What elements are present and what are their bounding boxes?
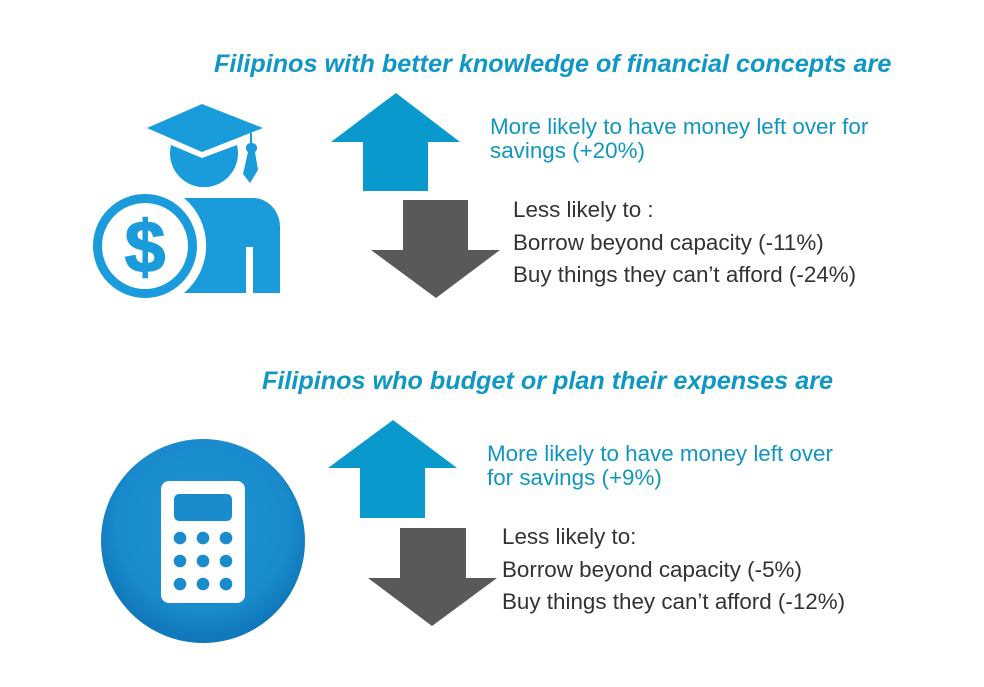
icon part: dollar sign: $ <box>125 207 165 288</box>
arrow: down, budgeting <box>368 528 497 626</box>
arrow: up, knowledge <box>331 93 460 191</box>
icon part: calculator body <box>161 481 245 603</box>
text: less likely, knowledge: Less likely to : <box>513 197 654 222</box>
icon part: body <box>184 198 280 293</box>
text: less likely, budgeting: Borrow beyond capacity (-5%) <box>502 557 802 582</box>
icon part: mortarboard cap <box>147 104 263 152</box>
icon: calculator in circle <box>101 439 305 643</box>
text: less likely, knowledge <box>513 197 856 287</box>
text: less likely, knowledge: Buy things they can’t afford (-24%) <box>513 262 856 287</box>
arrow: down, knowledge <box>371 200 500 298</box>
icon part: coin <box>98 198 192 294</box>
text: more likely, knowledge: savings (+20%) <box>490 138 645 163</box>
text: less likely, knowledge: Borrow beyond capacity (-11%) <box>513 230 824 255</box>
heading: budgeting: Filipinos who budget or plan their expenses are <box>262 367 833 395</box>
text: more likely, budgeting: More likely to have money left over <box>487 441 834 466</box>
text: more likely, budgeting <box>487 441 834 490</box>
heading: financial knowledge: Filipinos with better knowledge of financial concepts are <box>214 50 891 78</box>
icon: graduate with dollar coin <box>98 104 280 294</box>
text: more likely, knowledge <box>490 114 869 163</box>
icon part: calculator buttons <box>174 532 232 590</box>
icon part: tassel <box>243 133 258 183</box>
text: more likely, budgeting: for savings (+9%) <box>487 465 662 490</box>
text: less likely, budgeting <box>502 524 845 614</box>
icon part: head <box>170 145 238 187</box>
text: less likely, budgeting: Buy things they can’t afford (-12%) <box>502 589 845 614</box>
arrow: up, budgeting <box>328 420 457 518</box>
text: less likely, budgeting: Less likely to: <box>502 524 636 549</box>
text: more likely, knowledge: More likely to have money left over for <box>490 114 869 139</box>
icon part: calculator screen <box>174 494 232 521</box>
